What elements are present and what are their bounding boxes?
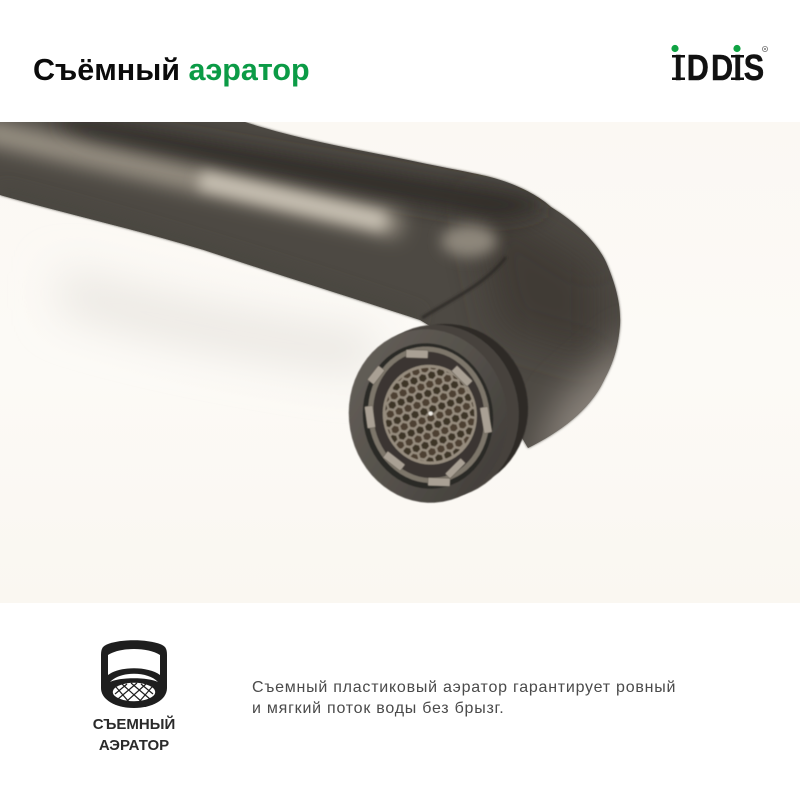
aerator collar (342, 308, 545, 513)
spout tube (0, 122, 622, 450)
aerator retaining tabs (365, 350, 492, 486)
description text (252, 679, 676, 717)
long highlight (0, 130, 400, 226)
description text: и мягкий поток воды без брызг. (252, 700, 504, 717)
dark upper band (60, 122, 540, 212)
right elbow tone (486, 224, 601, 350)
icon label: СЪЕМНЫЙ (93, 716, 175, 733)
icon label: АЭРАТОР (99, 737, 169, 754)
soft shadow under spout (60, 270, 380, 375)
mesh (375, 357, 485, 472)
aerator face (335, 317, 521, 515)
title: Съёмный аэратор (33, 53, 310, 87)
icon label (93, 716, 175, 754)
panel: product photo of faucet spout (0, 122, 800, 603)
elbow highlight (441, 225, 497, 257)
elbow crease (422, 257, 506, 318)
description text: Съемный пластиковый аэратор гарантирует ровный (252, 679, 676, 696)
lower dark band (0, 192, 420, 318)
icon: aerator (101, 640, 167, 708)
